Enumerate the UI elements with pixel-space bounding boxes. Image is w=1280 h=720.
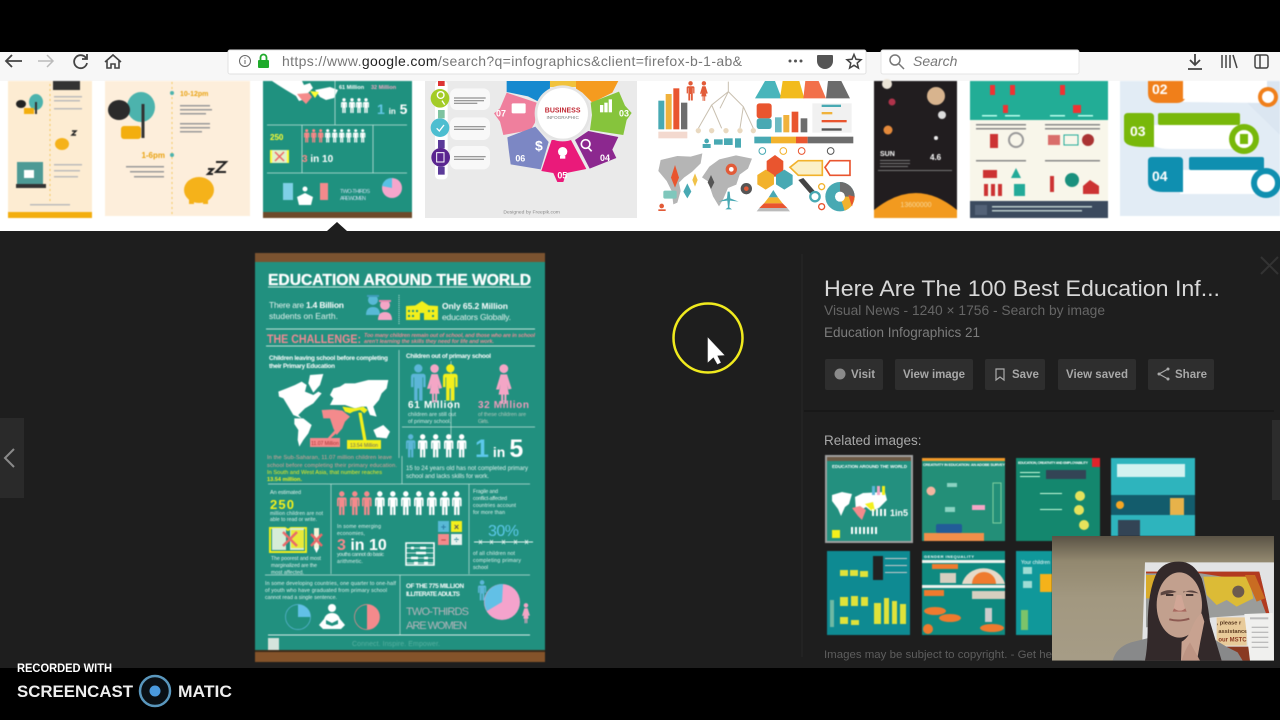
stat: students on earth <box>269 300 344 321</box>
stat: educators: educators Globally. <box>442 312 511 322</box>
related thumbnail 2: CREATIVITY IN EDUCATION: AN ADOBE SURVEY <box>923 463 1005 467</box>
icon: math symbols: ÷ <box>454 535 459 545</box>
related thumbnail 3 <box>1016 458 1100 541</box>
thumbnail: business wheel: 04 <box>600 153 610 163</box>
icon: math symbols: − <box>441 535 446 545</box>
stat: educators: Only 65.2 Million <box>442 301 508 311</box>
numeracy panel: arithmetic. <box>337 559 363 565</box>
related heading: Related images: <box>824 433 922 448</box>
caption: 15 to 24 years old has not completed primary <box>406 466 528 472</box>
wheel icons <box>512 99 612 159</box>
icon: home <box>105 55 121 68</box>
button: visit <box>825 359 883 390</box>
bottom black bar <box>0 668 1280 720</box>
icon: back arrow <box>6 55 22 67</box>
related thumbnail 1: 1in5 <box>890 508 908 518</box>
band <box>754 137 771 143</box>
thumbnail: business wheel: 06 <box>515 154 525 164</box>
panel pointer triangle <box>327 222 347 231</box>
thumbnail: dog timeline wide: 1-6pm <box>141 151 165 160</box>
pie chart <box>484 584 520 620</box>
related thumbnail 7 <box>1016 551 1052 635</box>
detail panel: heading: Here Are The 100 Best Education Inf... <box>824 276 1220 301</box>
wall poster <box>1142 562 1274 661</box>
icon: woman <box>522 603 530 623</box>
reading panel: of youth who have graduated from primary school <box>265 588 387 594</box>
thumbnail: education infographic selected: 1 in 5 <box>377 101 408 117</box>
challenge heading: Too many children remain out of school, and those who are in school <box>364 333 536 339</box>
map caption: In South and West Asia, that number reaches <box>267 470 382 476</box>
stat: 61 million: children are still out <box>408 412 456 418</box>
main infographic: education around the world <box>255 253 545 662</box>
url text: https://www.google.com/search?q=infographics&client=firefox-b-1-ab& <box>282 53 743 69</box>
footer: connect inspire empower: Connect. Inspire. Empower. <box>352 641 440 648</box>
search placeholder: Search <box>913 53 958 69</box>
wrench and gears <box>798 178 815 195</box>
icon: ten people <box>337 491 462 515</box>
fragile countries panel: completing primary <box>473 558 521 564</box>
icon: man <box>478 580 486 600</box>
icon: reload <box>74 54 87 68</box>
list <box>812 103 852 133</box>
wordmark right: MATIC <box>178 682 232 701</box>
related thumbnail 3: EDUCATION, CREATIVITY AND EMPLOYABILITY <box>1018 461 1089 465</box>
challenge heading: THE CHALLENGE: <box>267 334 361 346</box>
stat: 250: 250 <box>270 497 294 512</box>
fragile countries panel <box>473 489 533 571</box>
fragile countries panel: conflict-affected <box>473 496 507 502</box>
tags <box>790 161 822 175</box>
numeracy panel: economies, <box>337 531 365 537</box>
world map panel <box>267 355 397 483</box>
map caption: 13.54 million. <box>267 477 302 483</box>
right nav tab <box>1272 420 1280 500</box>
thumbnail: business wheel: 05 <box>557 170 567 180</box>
icon: star <box>847 54 861 68</box>
related thumbnail 2 <box>922 458 1005 541</box>
world map <box>658 153 752 206</box>
related thumbnail 7: Your children <box>1021 560 1050 566</box>
world map panel: their Primary Education <box>269 363 335 370</box>
thumbnail: numbered ribbons: 02 <box>1152 81 1168 97</box>
title: EDUCATION AROUND THE WORLD <box>268 272 531 289</box>
related thumbnail 5 <box>827 551 910 635</box>
button: save: Save <box>1012 369 1039 381</box>
illiterate adults panel: OF THE 775 MILLION <box>406 583 464 590</box>
thumbnail: dog timeline narrow <box>8 81 92 218</box>
hexagons <box>767 155 783 177</box>
logo lens <box>140 676 170 706</box>
illiteracy panel <box>270 490 324 576</box>
icon: crossed book <box>270 528 306 552</box>
world map <box>278 374 390 447</box>
illiteracy panel: able to read or write. <box>270 517 317 523</box>
icon: forward arrow <box>38 55 53 67</box>
thumbnail: planets dark: 4.6 <box>930 153 942 162</box>
fragile countries panel: Fragile and <box>473 489 498 495</box>
illiteracy panel: million children are not <box>270 511 324 517</box>
illiteracy panel: marginalized are the <box>271 563 317 569</box>
stat: 32 million: of these children are <box>478 412 526 418</box>
challenge heading <box>267 333 536 346</box>
dark preview panel <box>0 231 1280 668</box>
illiterate adults panel: ARE WOMEN <box>406 620 467 632</box>
wheel icons: $ <box>535 138 543 154</box>
thumbnail: business wheel: 07 <box>496 109 506 119</box>
thumbnail: dog timeline wide <box>105 81 250 216</box>
thumbnail: business wheel: BUSINESS <box>545 108 581 115</box>
cursor highlight: yellow ring <box>674 304 742 372</box>
wall poster: our MSTC <box>1218 637 1247 643</box>
icon: padlock <box>258 55 269 68</box>
icon: dotted axis <box>474 541 533 543</box>
reading panel: cannot read a single sentence. <box>265 595 337 601</box>
icons <box>703 138 741 148</box>
icon: three children <box>411 364 458 403</box>
detail panel: heading: Visual News - 1240 × 1756 - Search by image <box>824 303 1105 318</box>
triangles <box>755 81 782 98</box>
stat: 32 million: Girls. <box>478 419 489 425</box>
thumbnail: numbered ribbons <box>1120 81 1280 216</box>
stat: 3 in 10: 3 in 10 <box>337 537 387 554</box>
challenge heading: aren't learning the skills they need for life and work. <box>364 339 494 345</box>
icon: school building <box>406 301 438 320</box>
button: view saved: View saved <box>1066 369 1128 381</box>
stat: 61 million <box>408 400 460 425</box>
related thumbnail 1: EDUCATION AROUND THE WORLD <box>832 464 908 469</box>
fragile countries panel: school <box>473 565 488 571</box>
out of school panel <box>406 353 529 425</box>
button: view image <box>895 359 973 390</box>
stat: students on earth: students on Earth. <box>269 311 338 321</box>
map heading: Children leaving school before completing <box>269 355 388 362</box>
related thumbnail 6: GENDER INEQUALITY <box>924 554 974 559</box>
icon: airplane <box>719 192 739 209</box>
thumbnail: planets dark <box>874 79 957 218</box>
illiterate adults panel <box>406 580 530 632</box>
thumbnail: education infographic selected: 250 <box>270 133 284 142</box>
panel heading: Children out of primary school <box>406 353 491 360</box>
icon: magnifier <box>890 55 904 69</box>
thumbnail strip <box>0 79 1280 231</box>
icon: downloads <box>1188 54 1202 69</box>
detail panel: heading: Education Infographics 21 <box>824 325 980 340</box>
one in five panel <box>406 434 528 480</box>
mini bars <box>775 112 807 132</box>
donut <box>825 182 855 211</box>
stat: 1 in 5: 1 in5 <box>475 435 523 463</box>
url bar <box>228 50 866 74</box>
thumbnail: numbered ribbons: 04 <box>1152 168 1168 184</box>
stat: 32 million: 32 Million <box>478 400 529 411</box>
thumbnail: planets dark: 13600000 <box>900 202 932 209</box>
highlight: two thirds: TWO-THIRDS <box>406 606 469 618</box>
thumbnail: business wheel: 03 <box>619 109 629 119</box>
browser toolbar <box>0 50 1280 81</box>
icon: abacus <box>406 543 434 565</box>
detail panel: heading <box>824 276 1220 340</box>
footer: connect inspire empower <box>268 635 530 650</box>
wall poster: , please r <box>1217 621 1242 627</box>
stat: 61 million: of primary school. <box>408 419 451 425</box>
map caption: school before completing their primary education. <box>267 463 397 469</box>
icon: library <box>1222 55 1237 68</box>
copyright note: Images may be subject to copyright. - Get he <box>824 649 1052 661</box>
thumbnail: numbered ribbons: 03 <box>1130 123 1146 139</box>
vertical divider <box>801 254 803 657</box>
illiterate adults panel: ILLITERATE ADULTS <box>406 591 460 598</box>
icon: people <box>687 81 708 101</box>
icon: math symbols: + <box>441 522 446 532</box>
stat: 30%: 30% <box>488 523 519 540</box>
thumbnail: business wheel: INFOGRAPHIC <box>546 115 579 120</box>
stat: students on earth: There are 1.4 Billion <box>269 300 344 310</box>
icon: graduates <box>366 295 392 320</box>
top black bar <box>0 0 1280 52</box>
left nav arrow <box>0 418 24 498</box>
map caption <box>267 455 397 483</box>
close icon <box>1261 257 1278 274</box>
thumbnail: education infographic selected: TWO-THIRDS <box>340 189 370 195</box>
fragile countries panel: of all children not <box>473 551 516 557</box>
icon: reader <box>319 604 345 629</box>
icon: mouse cursor <box>708 338 724 364</box>
wheel segments <box>494 93 537 135</box>
fragile countries panel: countries account <box>473 503 517 509</box>
button: view saved <box>1058 359 1136 390</box>
search box <box>881 50 1079 74</box>
screencast-o-matic logo <box>17 676 232 706</box>
map pins <box>671 164 752 198</box>
icon: math symbols <box>438 521 462 545</box>
thumbnail: dog timeline wide: 10-12pm <box>180 91 208 98</box>
button: share: Share <box>1175 369 1207 381</box>
fragile countries panel: for more than <box>473 510 505 516</box>
map caption: In the Sub-Saharan, 11.07 million children leave <box>267 455 392 461</box>
stat: educators <box>442 301 511 322</box>
button: save <box>985 359 1045 390</box>
thumbnail: planets dark: SUN <box>880 151 895 158</box>
thumbnail: mixed charts and map <box>658 81 855 218</box>
thumbnail: business wheel <box>425 81 637 218</box>
credit: Designed by Freepik.com <box>503 210 560 216</box>
illiteracy panel: most affected. <box>271 570 304 576</box>
illiteracy panel: The poorest and most <box>271 556 322 562</box>
icon: more dots <box>788 60 802 62</box>
icon: half pie <box>354 604 380 630</box>
thumbnail: teal statistics <box>970 81 1108 218</box>
icon: info <box>240 56 250 66</box>
numeracy panel <box>337 491 462 565</box>
thumbnail: education infographic selected: 3 in 10 <box>302 154 334 165</box>
related thumbnail 6 <box>922 551 1005 635</box>
label: 11.07 million: 11.07 Million <box>311 441 339 447</box>
reading panel: In some developing countries, one quarter to one-half <box>265 581 397 587</box>
icon: quarter pie <box>286 604 310 630</box>
label: 13.54 million: 13.54 Million <box>350 443 378 449</box>
related images <box>824 433 1195 661</box>
webcam overlay <box>1052 536 1274 661</box>
icon: five people <box>406 434 466 457</box>
icon: sidebar <box>1255 55 1268 68</box>
step rail <box>431 81 490 179</box>
wall poster: assistance <box>1218 629 1247 635</box>
icon: girl <box>496 364 512 404</box>
thumbnail: education infographic selected: 32 Million <box>371 85 397 91</box>
recorded with label: RECORDED WITH <box>17 661 112 675</box>
badge <box>757 103 772 118</box>
presenter <box>1113 562 1243 661</box>
one in five panel: school and lacks skills for work. <box>406 474 489 480</box>
button: share <box>1148 359 1214 390</box>
stat: 32 million <box>478 400 529 425</box>
thumbnail: education infographic selected: 61 Million <box>339 85 365 91</box>
pyramid <box>769 190 778 197</box>
tree <box>698 82 753 128</box>
related thumbnail 4 <box>1111 458 1195 536</box>
stat: 61 million: 61 Million <box>408 400 460 411</box>
thumbnail: education infographic selected <box>263 81 412 218</box>
reading panel <box>265 581 397 630</box>
icon: math symbols: × <box>454 522 459 532</box>
numeracy panel: In some emerging <box>337 524 381 530</box>
numeracy panel: youths cannot do basic <box>337 552 384 558</box>
related thumbnail 1 <box>825 455 913 543</box>
button: visit: Visit <box>851 369 875 381</box>
icon: crossed pencil <box>311 528 322 553</box>
illiteracy panel: An estimated <box>270 490 301 496</box>
button: view image: View image <box>903 369 965 381</box>
bars <box>658 88 687 129</box>
wordmark left: SCREENCAST <box>17 682 134 701</box>
action buttons <box>825 359 1214 390</box>
thumbnail: education infographic selected: ARE WOMEN <box>340 196 366 202</box>
icon: pocket <box>817 55 833 69</box>
